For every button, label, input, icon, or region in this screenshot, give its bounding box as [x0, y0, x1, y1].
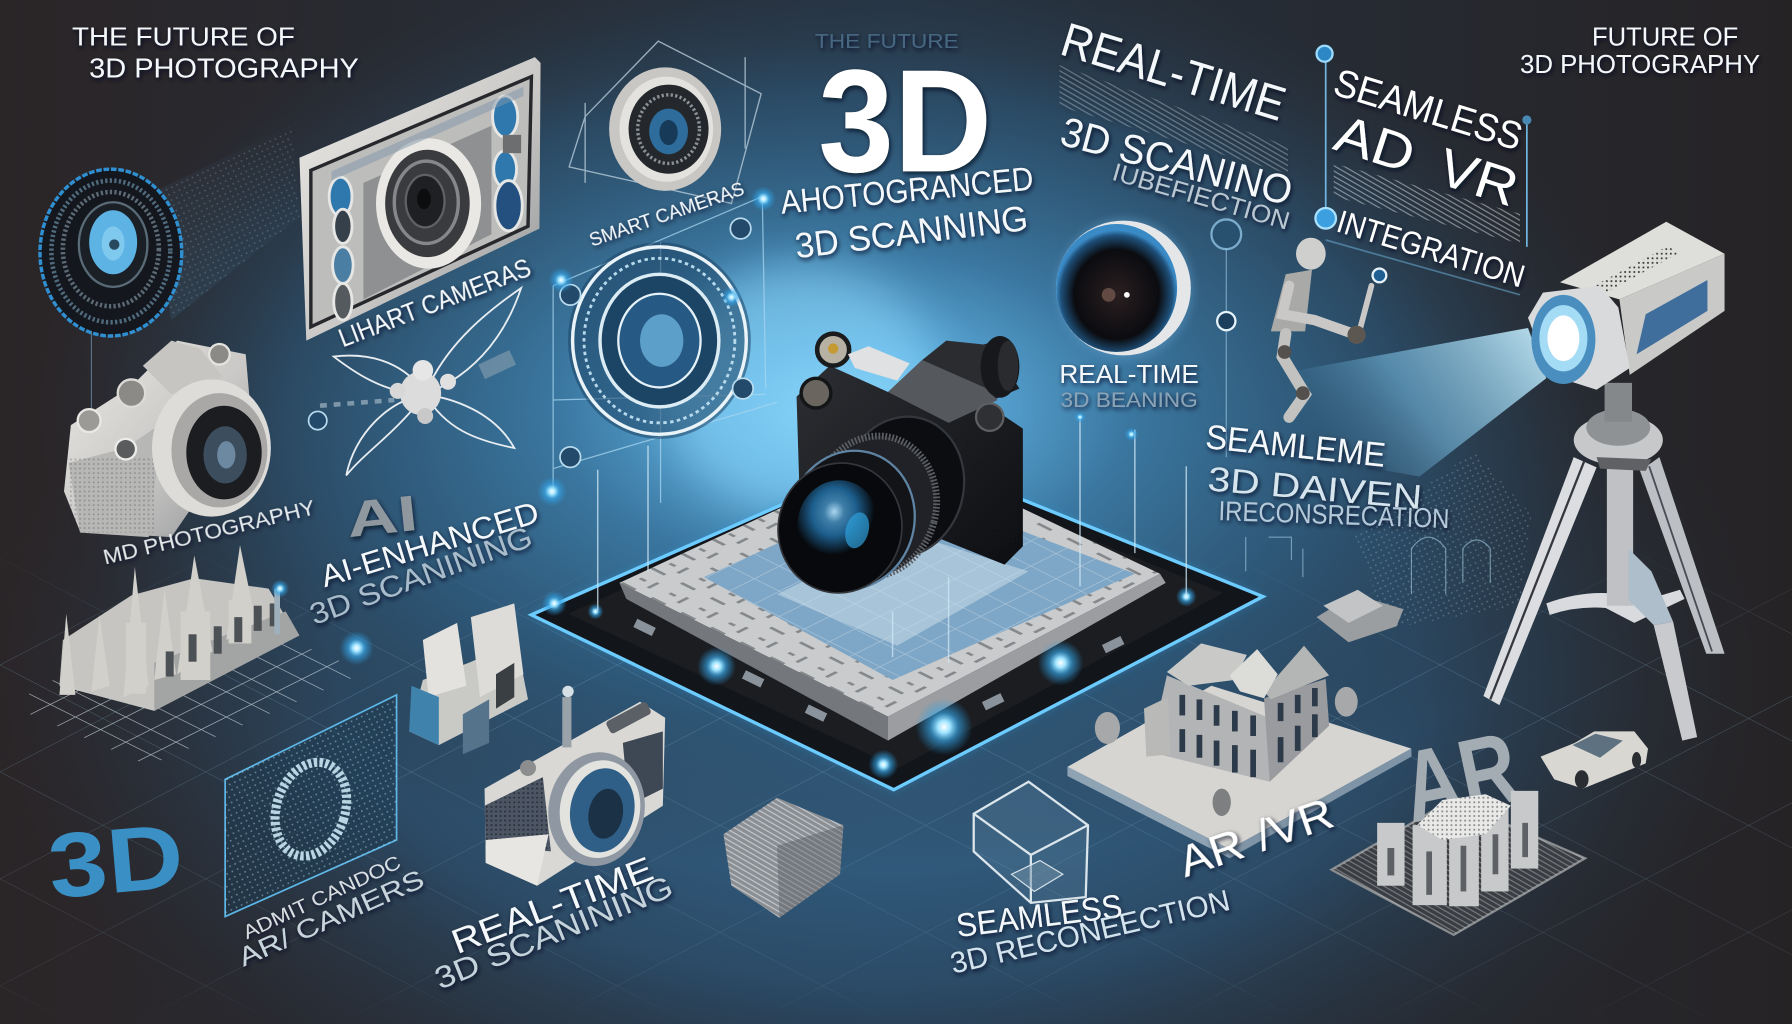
glass blueprint layer	[704, 486, 1135, 680]
building cluster	[1377, 791, 1538, 906]
arm	[1282, 286, 1371, 334]
label: AI-enhanced 3D scanning: AI	[344, 484, 420, 548]
right leg	[1640, 457, 1725, 654]
top wireframe lens	[569, 41, 761, 203]
house walls	[1150, 675, 1270, 782]
legs	[1282, 334, 1305, 417]
AR monument	[1331, 711, 1585, 935]
base	[1331, 800, 1585, 935]
label: md photography: MD PHOTOGRAPHY	[100, 494, 317, 569]
platform glow nodes	[697, 647, 736, 686]
central heading: 3D	[818, 39, 992, 202]
blueprint mesh and small model	[1246, 451, 1531, 642]
glowing nodes	[271, 411, 1138, 665]
torso	[1271, 270, 1312, 331]
camera lens	[1528, 286, 1630, 390]
collar	[1574, 415, 1663, 465]
label: admit candoc AR cameras: AR/ CAMERS	[234, 864, 429, 972]
towers	[59, 545, 256, 697]
platform pins	[598, 419, 1186, 663]
left lens with data stream	[40, 126, 299, 423]
label: seamless 3D reconnection: 3D RECONEECTION	[947, 884, 1233, 981]
lens barrel	[826, 403, 980, 571]
label: real-time mid: 3D BEANING	[1061, 387, 1198, 412]
label: real-time 3D scanning top: 3D SCANINO	[1056, 108, 1297, 214]
data stream	[149, 126, 299, 320]
roofs	[1167, 643, 1247, 686]
light beam	[1280, 328, 1546, 477]
label: real-time 3D scanning top: IUBEFIECTION	[1109, 158, 1293, 236]
lens	[152, 379, 271, 517]
label: seamless 3D driven reconstruction	[1204, 418, 1450, 534]
AR VR integration panel: AD VR	[1328, 104, 1525, 218]
wire mesh building	[723, 798, 843, 918]
scanned lens rings	[40, 169, 182, 336]
title: top left	[72, 22, 359, 84]
label: real-time 3D scanning lower: 3D SCANINING	[430, 869, 678, 996]
label: AI-enhanced 3D scanning: AI-ENHANCED	[316, 494, 543, 594]
central camera	[764, 334, 1023, 607]
label: real-time 3D scanning lower: REAL-TIME	[446, 850, 658, 962]
tripod	[1483, 383, 1725, 741]
central heading: AHOTOGRANCED	[779, 161, 1035, 222]
label: seamless 3D driven reconstruction: IRECONSRECATION	[1218, 495, 1450, 534]
AR VR integration panel	[1315, 46, 1531, 295]
title: top left: THE FUTURE OF	[72, 22, 295, 52]
head	[1296, 238, 1326, 270]
body	[64, 341, 251, 537]
central platform	[531, 419, 1263, 790]
AI letter blocks	[409, 603, 528, 754]
label: real-time 3D scanning top	[1055, 14, 1297, 236]
trees	[1095, 687, 1358, 816]
title: top right	[1520, 22, 1760, 79]
label: smart cameras large: LIHART CAMERAS	[334, 252, 535, 353]
white camera left	[64, 341, 271, 537]
label: seamless 3D driven reconstruction: 3D DAIVEN	[1206, 460, 1424, 517]
screen buttons	[329, 96, 522, 320]
title: top right: 3D PHOTOGRAPHY	[1520, 49, 1760, 79]
robot figure	[1271, 238, 1371, 417]
screen lens	[376, 138, 481, 269]
AR big letters: AR	[1393, 711, 1528, 844]
title: top right: FUTURE OF	[1592, 22, 1738, 52]
propeller diagram	[320, 288, 521, 475]
windows	[1179, 688, 1318, 777]
projector camera on tripod	[1483, 222, 1725, 741]
label: real-time 3D scanning lower	[430, 850, 678, 996]
silver layer	[619, 451, 1160, 717]
label: smart cameras small: SMART CAMERAS	[586, 178, 747, 252]
AR VR texture strip	[1334, 163, 1520, 243]
spreader bars	[1546, 590, 1685, 623]
connector nodes	[1211, 219, 1386, 457]
castle mass	[59, 578, 299, 711]
glowing nodes	[549, 267, 574, 293]
small white car	[1541, 731, 1648, 789]
left leg	[1483, 457, 1597, 705]
central heading: 3D SCANNING	[793, 198, 1030, 266]
platform glow border	[531, 451, 1263, 790]
label: AR VR: AR /VR	[1173, 790, 1340, 887]
label: real-time mid: REAL-TIME	[1059, 359, 1199, 389]
label: admit candoc AR cameras	[234, 852, 429, 972]
smart camera screen panel	[299, 57, 541, 341]
label: real-time 3D scanning top: REAL-TIME	[1055, 14, 1291, 132]
house model	[1067, 643, 1411, 858]
label: AI-enhanced 3D scanning: 3D SCANINING	[305, 521, 537, 632]
central heading	[779, 30, 1035, 266]
large blue 3D: 3D	[44, 805, 188, 918]
dial cluster	[817, 334, 849, 366]
castle model on grid	[9, 545, 366, 766]
lens glass	[788, 471, 888, 576]
eyepiece	[981, 336, 1019, 398]
central heading: THE FUTURE	[815, 30, 959, 53]
label: seamless 3D driven reconstruction: SEAMLEME	[1204, 418, 1387, 475]
dials	[78, 409, 101, 432]
mesh scan panel	[225, 695, 397, 917]
glass cube	[974, 782, 1088, 903]
viewfinder hump	[888, 345, 998, 423]
camera body	[797, 343, 1023, 565]
scan texture strip	[1059, 65, 1288, 174]
silver retro camera	[485, 686, 665, 886]
middle leg	[1607, 467, 1633, 606]
base	[1067, 686, 1411, 849]
label: real-time mid	[1059, 359, 1199, 412]
panel badges	[309, 218, 753, 467]
label: AI-enhanced 3D scanning	[305, 484, 543, 632]
label: seamless 3D reconnection: SEAMLESS	[954, 888, 1124, 945]
small gray model	[1317, 594, 1403, 642]
holographic lens panel	[309, 186, 777, 506]
AR VR integration panel: INTEGRATION	[1333, 203, 1529, 294]
AR VR integration panel: SEAMLESS	[1329, 61, 1527, 159]
camera body	[1560, 222, 1725, 299]
black lens sphere	[1056, 218, 1193, 360]
platform icons	[633, 619, 1124, 722]
title: top left: 3D PHOTOGRAPHY	[89, 53, 359, 84]
label: admit candoc AR cameras: ADMIT CANDOC	[240, 852, 404, 944]
